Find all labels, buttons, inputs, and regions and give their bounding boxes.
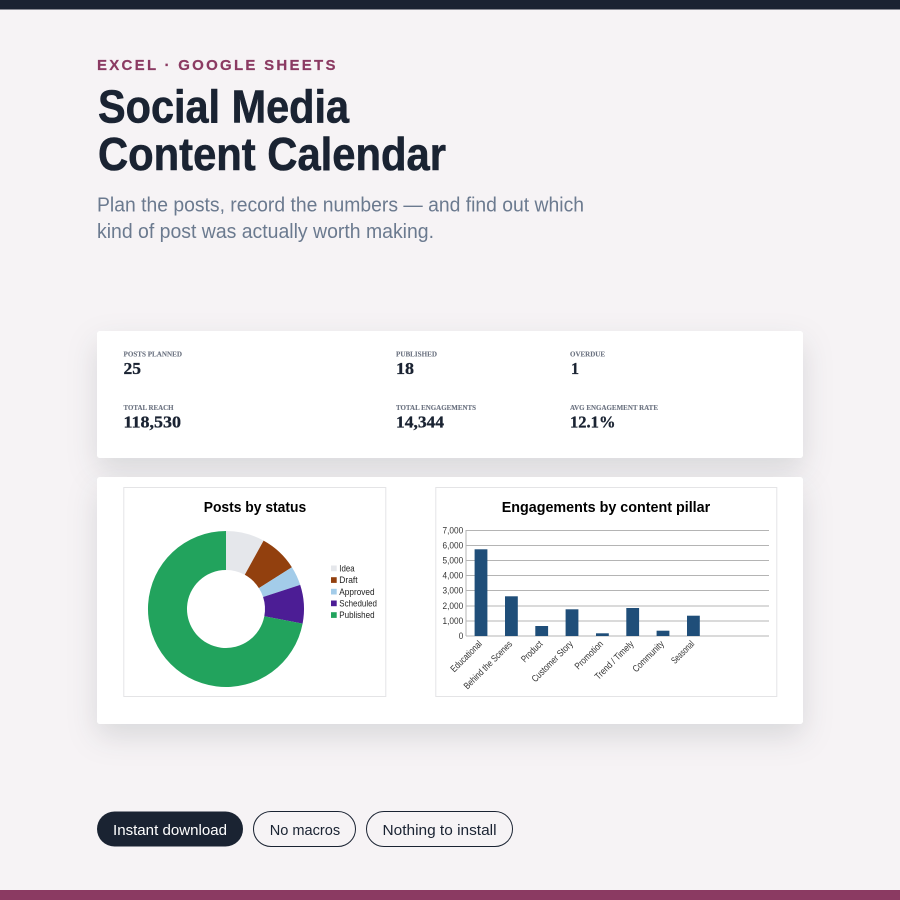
KPI: posts planned	[124, 350, 183, 378]
donut slices	[148, 531, 304, 687]
KPI: total reach: 118,530	[124, 412, 181, 431]
subtitle	[97, 194, 584, 243]
KPI: posts planned: 25	[124, 359, 141, 378]
x axis labels: Community	[631, 639, 667, 675]
KPI: overdue: OVERDUE	[570, 350, 605, 358]
subtitle: Plan the posts, record the numbers — and find out which	[97, 194, 584, 216]
legend: Published	[339, 610, 375, 621]
KPI: average engagement rate: AVG ENGAGEMENT RATE	[570, 403, 658, 412]
chart title: posts by status: Posts by status	[204, 499, 306, 516]
y axis labels: 4,000	[442, 570, 463, 582]
x axis labels: Trend / Timely	[593, 639, 636, 682]
badge: no macros: No macros	[270, 822, 340, 839]
y axis labels: 2,000	[442, 601, 463, 612]
y axis labels: 7,000	[442, 526, 463, 536]
title: Content Calendar	[98, 128, 446, 180]
bottom bar	[0, 890, 900, 900]
donut chart: posts by status	[124, 488, 386, 696]
KPI: total engagements: TOTAL ENGAGEMENTS	[396, 403, 476, 412]
legend: Approved	[339, 587, 375, 598]
y axis labels: 0	[459, 631, 463, 642]
legend: Scheduled	[339, 598, 377, 610]
KPI: total reach: TOTAL REACH	[124, 403, 174, 412]
x axis labels: Seasonal	[669, 639, 697, 666]
x axis labels: Behind the Scenes	[462, 639, 515, 692]
KPI: published: 18	[396, 359, 414, 378]
legend: Idea	[339, 564, 355, 574]
KPI: posts planned: POSTS PLANNED	[124, 350, 183, 358]
badge: nothing to install: Nothing to install	[382, 822, 496, 839]
eyebrow: EXCEL · GOOGLE SHEETS	[97, 57, 336, 74]
subtitle: kind of post was actually worth making.	[97, 221, 434, 243]
title: Social Media	[98, 80, 349, 132]
y axis labels: 3,000	[442, 586, 463, 596]
top bar	[0, 0, 900, 10]
bar chart: engagements by content pillar	[436, 488, 777, 696]
KPI: total engagements: 14,344	[396, 412, 445, 431]
y axis labels: 6,000	[442, 540, 463, 552]
badge: nothing to install	[366, 812, 512, 846]
y axis labels	[442, 526, 463, 642]
x axis labels: Customer Story	[530, 639, 576, 685]
x axis labels: Promotion	[573, 639, 606, 672]
bars	[475, 549, 700, 636]
legend: Draft	[339, 575, 358, 586]
badge: no macros	[254, 812, 356, 846]
KPI: total reach	[124, 403, 181, 431]
x axis labels	[449, 639, 697, 692]
badge: instant download	[97, 812, 243, 846]
panel: charts	[97, 477, 803, 724]
title	[98, 80, 446, 180]
KPI: overdue	[570, 350, 605, 378]
KPI: overdue: 1	[571, 359, 579, 378]
KPI: average engagement rate	[570, 403, 658, 431]
panel: KPI summary	[97, 331, 803, 458]
KPI: published: PUBLISHED	[396, 350, 438, 358]
badge: instant download: Instant download	[113, 822, 227, 839]
KPI: published	[396, 350, 438, 378]
x axis labels: Product	[519, 639, 546, 665]
KPI: average engagement rate: 12.1%	[570, 412, 616, 431]
KPI: total engagements	[396, 403, 476, 431]
y axis labels: 1,000	[442, 616, 463, 627]
chart title: engagements by content pillar: Engagements by content pillar	[502, 499, 710, 516]
legend	[331, 564, 377, 621]
x axis labels: Educational	[449, 639, 485, 675]
y axis labels: 5,000	[442, 556, 463, 566]
